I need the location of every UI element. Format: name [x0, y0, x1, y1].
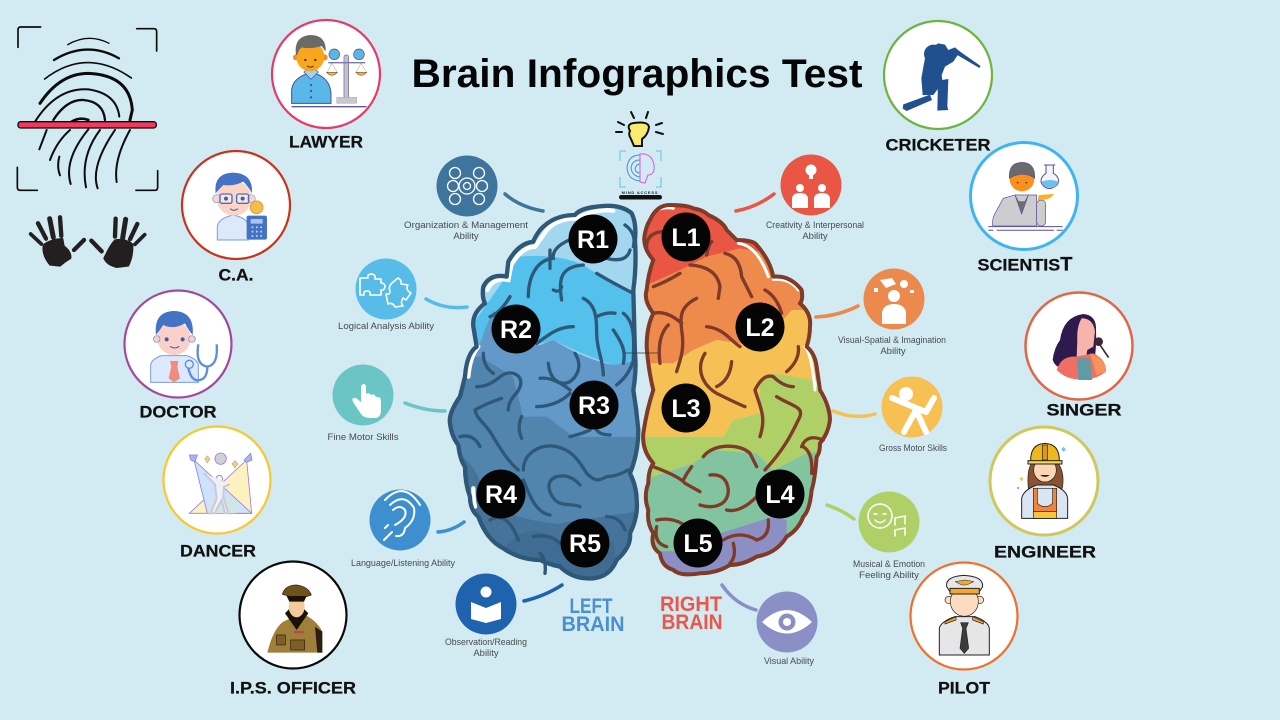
- card: doctor: [124, 290, 232, 422]
- icon: doctor: [151, 311, 217, 382]
- label: ca: C.A.: [218, 266, 254, 284]
- heading: left brain: [562, 595, 624, 636]
- badge: R4: [476, 470, 526, 518]
- badge: L1: [662, 212, 710, 262]
- badge: L3: L3: [671, 395, 701, 423]
- caption: Musical & Emotion: [853, 559, 925, 570]
- heading: left brain: LEFT: [570, 595, 613, 618]
- logo: mind access: [616, 112, 663, 200]
- label: scientist: SCIENTIST: [978, 254, 1073, 276]
- heading: right brain: RIGHT: [660, 593, 722, 616]
- folds: [647, 232, 823, 563]
- badge: L4: L4: [765, 481, 795, 509]
- ability: visual: [756, 592, 818, 667]
- badge: R2: [492, 304, 540, 354]
- icon: pointing hand: [352, 384, 381, 418]
- card: engineer: [990, 427, 1098, 562]
- ability: musical emotion: [853, 492, 925, 581]
- caption line 2: Ability: [802, 231, 828, 242]
- card: scientist: [970, 142, 1078, 276]
- ability: language listening: [351, 490, 455, 569]
- icon: lawyer: [292, 35, 367, 107]
- badge: R4: R4: [485, 481, 517, 509]
- badge: R2: R2: [500, 316, 532, 344]
- caption: Creativity & Interpersonal: [766, 220, 864, 231]
- icon: pilot: [939, 575, 989, 655]
- badge: L3: [662, 384, 710, 432]
- scan bar: [18, 122, 156, 128]
- icon: reader: [471, 586, 501, 623]
- ability: logical analysis: [338, 258, 434, 332]
- icon: thinking person: [874, 278, 914, 324]
- caption line 2: Ability: [473, 648, 499, 659]
- badge: L2: [736, 302, 784, 352]
- card: pilot: [910, 562, 1018, 698]
- card: ips officer: [230, 562, 356, 698]
- card: chartered accountant: [182, 151, 290, 284]
- icon: people around gear: [448, 168, 488, 204]
- icon: puzzle pieces: [360, 274, 411, 307]
- caption: Organization & Management: [404, 220, 528, 231]
- label: ips officer: I.P.S. OFFICER: [230, 678, 356, 698]
- icon: accountant: [213, 173, 267, 240]
- caption line 2: Feeling Ability: [859, 570, 919, 581]
- icon: light bulb: [616, 112, 663, 146]
- label: singer: SINGER: [1046, 400, 1122, 420]
- label: cricketer: CRICKETER: [886, 136, 990, 154]
- caption line 2: Ability: [453, 231, 479, 242]
- ability: visual spatial: [838, 268, 946, 357]
- icon: ear: [384, 491, 420, 540]
- caption: Visual Ability: [764, 656, 814, 667]
- card: singer: [1026, 292, 1132, 420]
- icon: running figure: [892, 387, 934, 432]
- icon: two people with bulb: [792, 164, 830, 208]
- caption line 2: Ability: [880, 346, 906, 357]
- badge: R1: R1: [577, 226, 609, 254]
- badge: L2: L2: [745, 314, 775, 342]
- label: lawyer: LAWYER: [289, 132, 363, 152]
- badge: L5: [674, 518, 722, 568]
- left-side brain hemisphere (rainbow): [641, 203, 832, 576]
- ability: fine motor: [328, 364, 399, 443]
- icon: eye: [762, 610, 812, 634]
- title: Brain Infographics Test: [412, 52, 862, 96]
- right-side brain hemisphere (blue): [448, 204, 640, 581]
- icon: dancer: [189, 453, 252, 513]
- label: dancer: DANCER: [180, 542, 256, 560]
- icon: smile and music notes: [868, 504, 905, 536]
- tagline pill: [619, 195, 662, 200]
- card: lawyer: [272, 20, 380, 152]
- label: doctor: DOCTOR: [140, 402, 216, 422]
- badge: L4: [756, 470, 804, 518]
- heading: right brain: BRAIN: [662, 611, 722, 634]
- card: cricketer: [884, 21, 992, 154]
- connector lines: [405, 194, 875, 610]
- caption: Logical Analysis Ability: [338, 321, 434, 332]
- heading: left brain: BRAIN: [562, 613, 624, 636]
- badge: R3: R3: [578, 392, 610, 420]
- icon: singer: [1053, 314, 1109, 380]
- text: mind access: MIND ACCESS: [622, 190, 658, 195]
- icon: scientist: [988, 162, 1063, 230]
- highlight: [657, 208, 815, 390]
- caption: Visual-Spatial & Imagination: [838, 335, 946, 346]
- label: pilot: PILOT: [938, 678, 991, 698]
- outline: [450, 206, 638, 578]
- heading: right brain: [660, 593, 722, 634]
- caption: Fine Motor Skills: [328, 432, 399, 443]
- badge: R3: [570, 380, 618, 430]
- ability: organization and management: [404, 156, 528, 242]
- card: dancer: [164, 426, 270, 560]
- ability: gross motor: [879, 376, 947, 454]
- label: engineer: ENGINEER: [994, 542, 1096, 562]
- icon: officer: [267, 585, 322, 653]
- ability: creativity: [766, 154, 864, 242]
- badge: R1: [568, 214, 618, 264]
- badge: R5: R5: [569, 530, 601, 558]
- caption: Observation/Reading: [445, 637, 527, 648]
- icon: fingerprint brain: [620, 151, 661, 187]
- icon: engineer: [1017, 443, 1068, 518]
- caption: Gross Motor Skills: [879, 443, 947, 454]
- folds: [460, 225, 635, 573]
- thin center line: [625, 352, 658, 354]
- ability: observation reading: [445, 574, 527, 659]
- icon: handprints: [31, 217, 145, 267]
- highlight: [468, 210, 613, 507]
- badge: R5: [560, 518, 610, 568]
- icon: batsman: [903, 43, 981, 111]
- caption: Language/Listening Ability: [351, 558, 455, 569]
- icon: fingerprint scanner: [17, 27, 158, 190]
- outline: [643, 205, 830, 574]
- badge: L1: L1: [671, 224, 701, 252]
- badge: L5: L5: [683, 530, 713, 558]
